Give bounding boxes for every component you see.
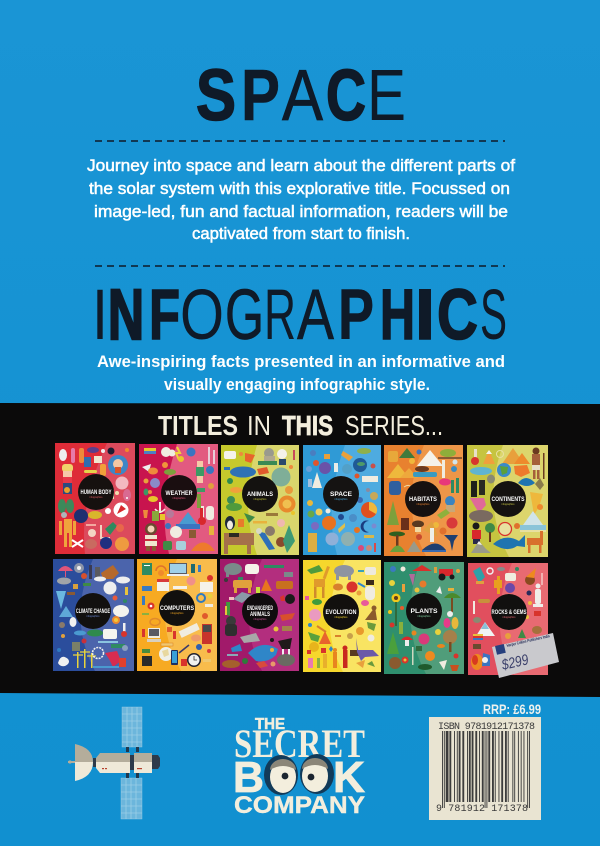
black series band: [0, 403, 600, 697]
title circle: Rocks & Gems: ROCKS & GEMS: [492, 609, 527, 616]
description text block: [87, 157, 515, 243]
barcode: 9 781912 171378: [436, 804, 528, 815]
cover: Continents: [467, 445, 548, 557]
title circle: Endangered Animals: ENDANGERED: [247, 605, 273, 612]
heading: INFOGRAPHICS: S: [480, 276, 507, 355]
heading: titles in this series: [158, 410, 443, 441]
price sticker: $299: [499, 651, 531, 674]
cover: Computers: [137, 559, 217, 671]
title circle: Space: SPACE: [330, 491, 353, 498]
barcode: ISBN 9781912171378: [438, 722, 535, 733]
cover: Habitats: [384, 445, 463, 556]
heading: INFOGRAPHICS: G: [225, 276, 264, 355]
logo: The Secret Book Company: SECRET: [234, 721, 365, 766]
logo: The Secret Book Company: THE: [255, 716, 285, 733]
title: SPACE: [196, 56, 406, 136]
title circle: Endangered Animals: ANIMALS: [250, 611, 270, 618]
title circle: Habitats: infographics: [417, 503, 430, 506]
price sticker: Harper Collins Publishers India: [506, 633, 551, 648]
price sticker: [492, 633, 559, 678]
heading: INFOGRAPHICS: C: [437, 276, 478, 355]
description text block: captivated from start to finish.: [192, 225, 410, 243]
heading: titles in this series: IN: [247, 410, 271, 441]
title: SPACE: P: [241, 56, 280, 136]
cover: Animals: [221, 445, 299, 555]
title circle: Weather: [161, 475, 197, 511]
title circle: Computers: infographics: [171, 612, 184, 615]
cover: Evolution: [303, 560, 381, 672]
title circle: Human Body: infographics: [90, 496, 103, 499]
title circle: Computers: [159, 590, 195, 626]
title circle: Habitats: [405, 481, 441, 517]
heading: INFOGRAPHICS: P: [338, 276, 374, 355]
title circle: Continents: [490, 481, 526, 517]
cover: Weather: [139, 444, 218, 554]
title circle: Plants: [406, 593, 442, 629]
description text block: Journey into space and learn about the different parts of: [87, 157, 515, 175]
logo: The Secret Book Company: [233, 716, 365, 819]
heading: titles in this series: TITLES: [158, 410, 238, 441]
title: SPACE: A: [282, 56, 323, 136]
description text block: the solar system with this explorative title. Focussed on: [89, 180, 510, 198]
tagline: [97, 353, 505, 394]
cover: Endangered Animals: [220, 559, 299, 671]
title circle: Evolution: EVOLUTION: [326, 609, 357, 616]
price label: RRP: £6.99: [483, 701, 541, 717]
title circle: Climate Change: [75, 593, 111, 629]
title circle: Habitats: HABITATS: [409, 496, 438, 503]
title: SPACE: C: [326, 56, 366, 136]
heading: titles in this series: THIS: [282, 410, 333, 441]
heading: INFOGRAPHICS: [92, 276, 507, 355]
heading: INFOGRAPHICS: H: [380, 276, 415, 355]
title circle: Animals: [242, 476, 278, 512]
title circle: Evolution: [323, 594, 359, 630]
heading: INFOGRAPHICS: O: [180, 276, 224, 355]
heading: INFOGRAPHICS: I: [92, 276, 108, 355]
logo: The Secret Book Company: K: [333, 753, 365, 802]
cover: Rocks & Gems: [468, 563, 548, 675]
heading: titles in this series: SERIES...: [345, 410, 443, 441]
title circle: Endangered Animals: infographics: [254, 618, 267, 621]
logo: The Secret Book Company: B: [233, 753, 264, 802]
title: SPACE: E: [367, 56, 406, 136]
cover: Human Body: [55, 443, 135, 554]
title circle: Endangered Animals: [242, 593, 278, 629]
description text block: image-led, fun and factual information, readers will be: [94, 203, 508, 221]
icon: satellite: [68, 707, 160, 819]
title circle: Weather: WEATHER: [166, 490, 193, 497]
title circle: Climate Change: infographics: [87, 615, 100, 618]
tagline: visually engaging infographic style.: [164, 376, 430, 394]
title circle: Rocks & Gems: infographics: [503, 616, 516, 619]
title circle: Continents: infographics: [502, 503, 515, 506]
title circle: Human Body: HUMAN BODY: [80, 489, 112, 496]
heading: INFOGRAPHICS: F: [149, 276, 180, 355]
title circle: Computers: COMPUTERS: [160, 605, 195, 612]
heading: INFOGRAPHICS: I: [415, 276, 435, 355]
title circle: Evolution: infographics: [335, 616, 348, 619]
title circle: Plants: infographics: [418, 615, 431, 618]
heading: INFOGRAPHICS: R: [264, 276, 296, 355]
title circle: Space: infographics: [335, 498, 348, 501]
title circle: Continents: CONTINENTS: [492, 496, 525, 503]
cover: Climate Change: [53, 559, 134, 671]
logo: The Secret Book Company: COMPANY: [234, 792, 365, 819]
title circle: Human Body: [78, 474, 114, 510]
title: SPACE: S: [196, 56, 236, 136]
heading: INFOGRAPHICS: N: [108, 276, 144, 355]
heading: INFOGRAPHICS: A: [297, 276, 335, 355]
cover: Space: [303, 445, 381, 555]
title circle: Animals: ANIMALS: [247, 491, 274, 498]
title circle: Climate Change: CLIMATE CHANGE: [76, 608, 110, 615]
cover: Plants: [384, 562, 464, 674]
barcode: [429, 717, 541, 820]
title circle: Rocks & Gems: [491, 594, 527, 630]
title circle: Space: [323, 476, 359, 512]
title circle: Weather: infographics: [173, 497, 186, 500]
title circle: Animals: infographics: [254, 498, 267, 501]
tagline: Awe-inspiring facts presented in an informative and: [97, 353, 505, 371]
title circle: Plants: PLANTS: [410, 608, 438, 615]
